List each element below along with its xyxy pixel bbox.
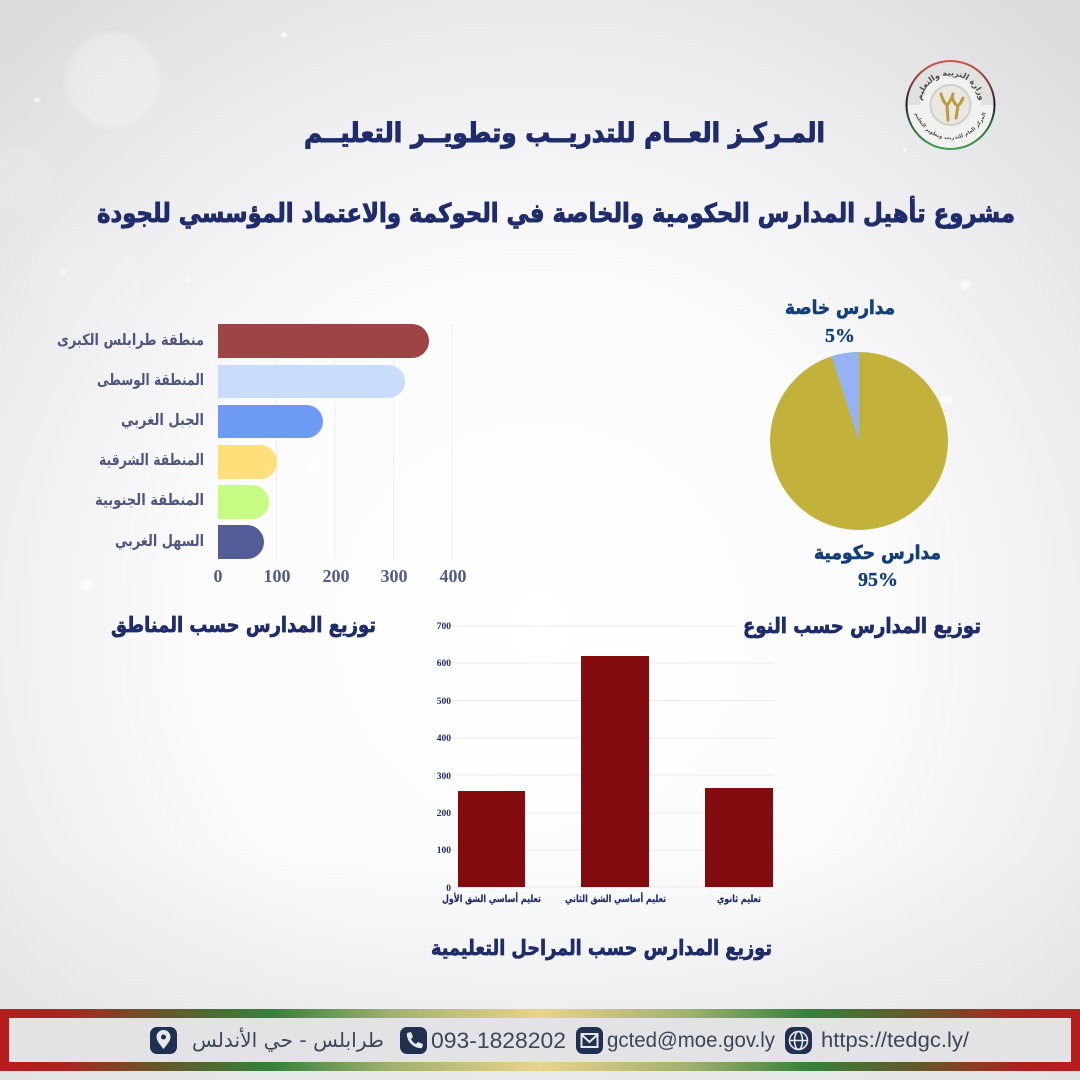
label: private schools: 5% [825,325,855,347]
label: public schools: مدارس حكومية [814,542,941,564]
column chart: schools by education stage: 100 [437,846,451,856]
axis values: 200 [322,566,350,586]
column chart: schools by education stage: 200 [437,809,451,819]
bar: Eastern [218,445,277,479]
icon: email [576,1027,603,1054]
column: basic first cycle [458,791,525,887]
column chart: schools by education stage [437,622,774,905]
column chart: schools by education stage: 300 [437,772,451,782]
column chart: schools by education stage: 600 [437,659,451,669]
category labels: المنطقة الشرقية [99,451,204,469]
heading: schools by education stage: توزيع المدارس حسب المراحل التعليمية [431,936,772,960]
heading: schools by type: توزيع المدارس حسب النوع [743,614,981,638]
logo: وزارة التربية والتعليم [919,72,982,101]
label: private schools [785,297,895,347]
phone number: 093-1828202 [431,1028,566,1053]
label: private schools: مدارس خاصة [785,297,895,319]
label: public schools: 95% [858,569,898,591]
column labels: تعليم ثانوي [717,894,761,905]
heading: schools by region: توزيع المدارس حسب المناطق [111,613,376,637]
website: https://tedgc.ly/ [821,1029,969,1052]
column labels: تعليم أساسي الشق الأول [442,892,541,905]
bar: Central [218,365,405,398]
column chart: schools by education stage: 400 [437,734,451,744]
address: طرابلس - حي الأندلس [192,1028,384,1053]
category labels: المنطقة الوسطى [97,371,204,389]
bar chart: schools by region [57,324,466,586]
column chart: schools by education stage: 0 [446,884,451,894]
column chart: schools by education stage: 500 [437,697,451,707]
category labels: الجبل الغربي [121,411,204,430]
icon: phone [400,1027,427,1054]
category labels: المنطقة الجنوبية [95,491,204,509]
pie chart: schools by type [770,297,948,591]
email address: gcted@moe.gov.ly [607,1029,775,1052]
axis values: 400 [440,566,466,586]
column: secondary [705,788,773,887]
column labels [442,892,761,905]
bar: Greater Tripoli [218,324,429,358]
category labels [57,331,204,551]
column: basic second cycle [581,656,649,887]
category labels: السهل الغربي [115,532,204,551]
bar: Western Plain [218,525,264,559]
label: public schools [814,542,941,591]
axis values: 300 [380,566,408,586]
category labels: منطقة طرابلس الكبرى [57,331,204,349]
footer contact bar [0,1009,1080,1071]
column chart: schools by education stage: 700 [437,622,451,632]
logo: المركز العام للتدريب وتطوير التعليم [914,112,986,140]
icon: location pin [150,1027,177,1054]
icon: globe [785,1027,812,1054]
column labels: تعليم أساسي الشق الثاني [565,892,666,905]
title: general center: المـركـز العــام للتدريــب وتطويــر التعليــم [304,118,825,149]
bar: Western Mountain [218,405,323,438]
axis values: 0 [214,566,222,586]
logo [906,60,996,150]
axis values [214,566,466,586]
axis values: 100 [264,566,290,586]
bar: Southern [218,485,269,519]
